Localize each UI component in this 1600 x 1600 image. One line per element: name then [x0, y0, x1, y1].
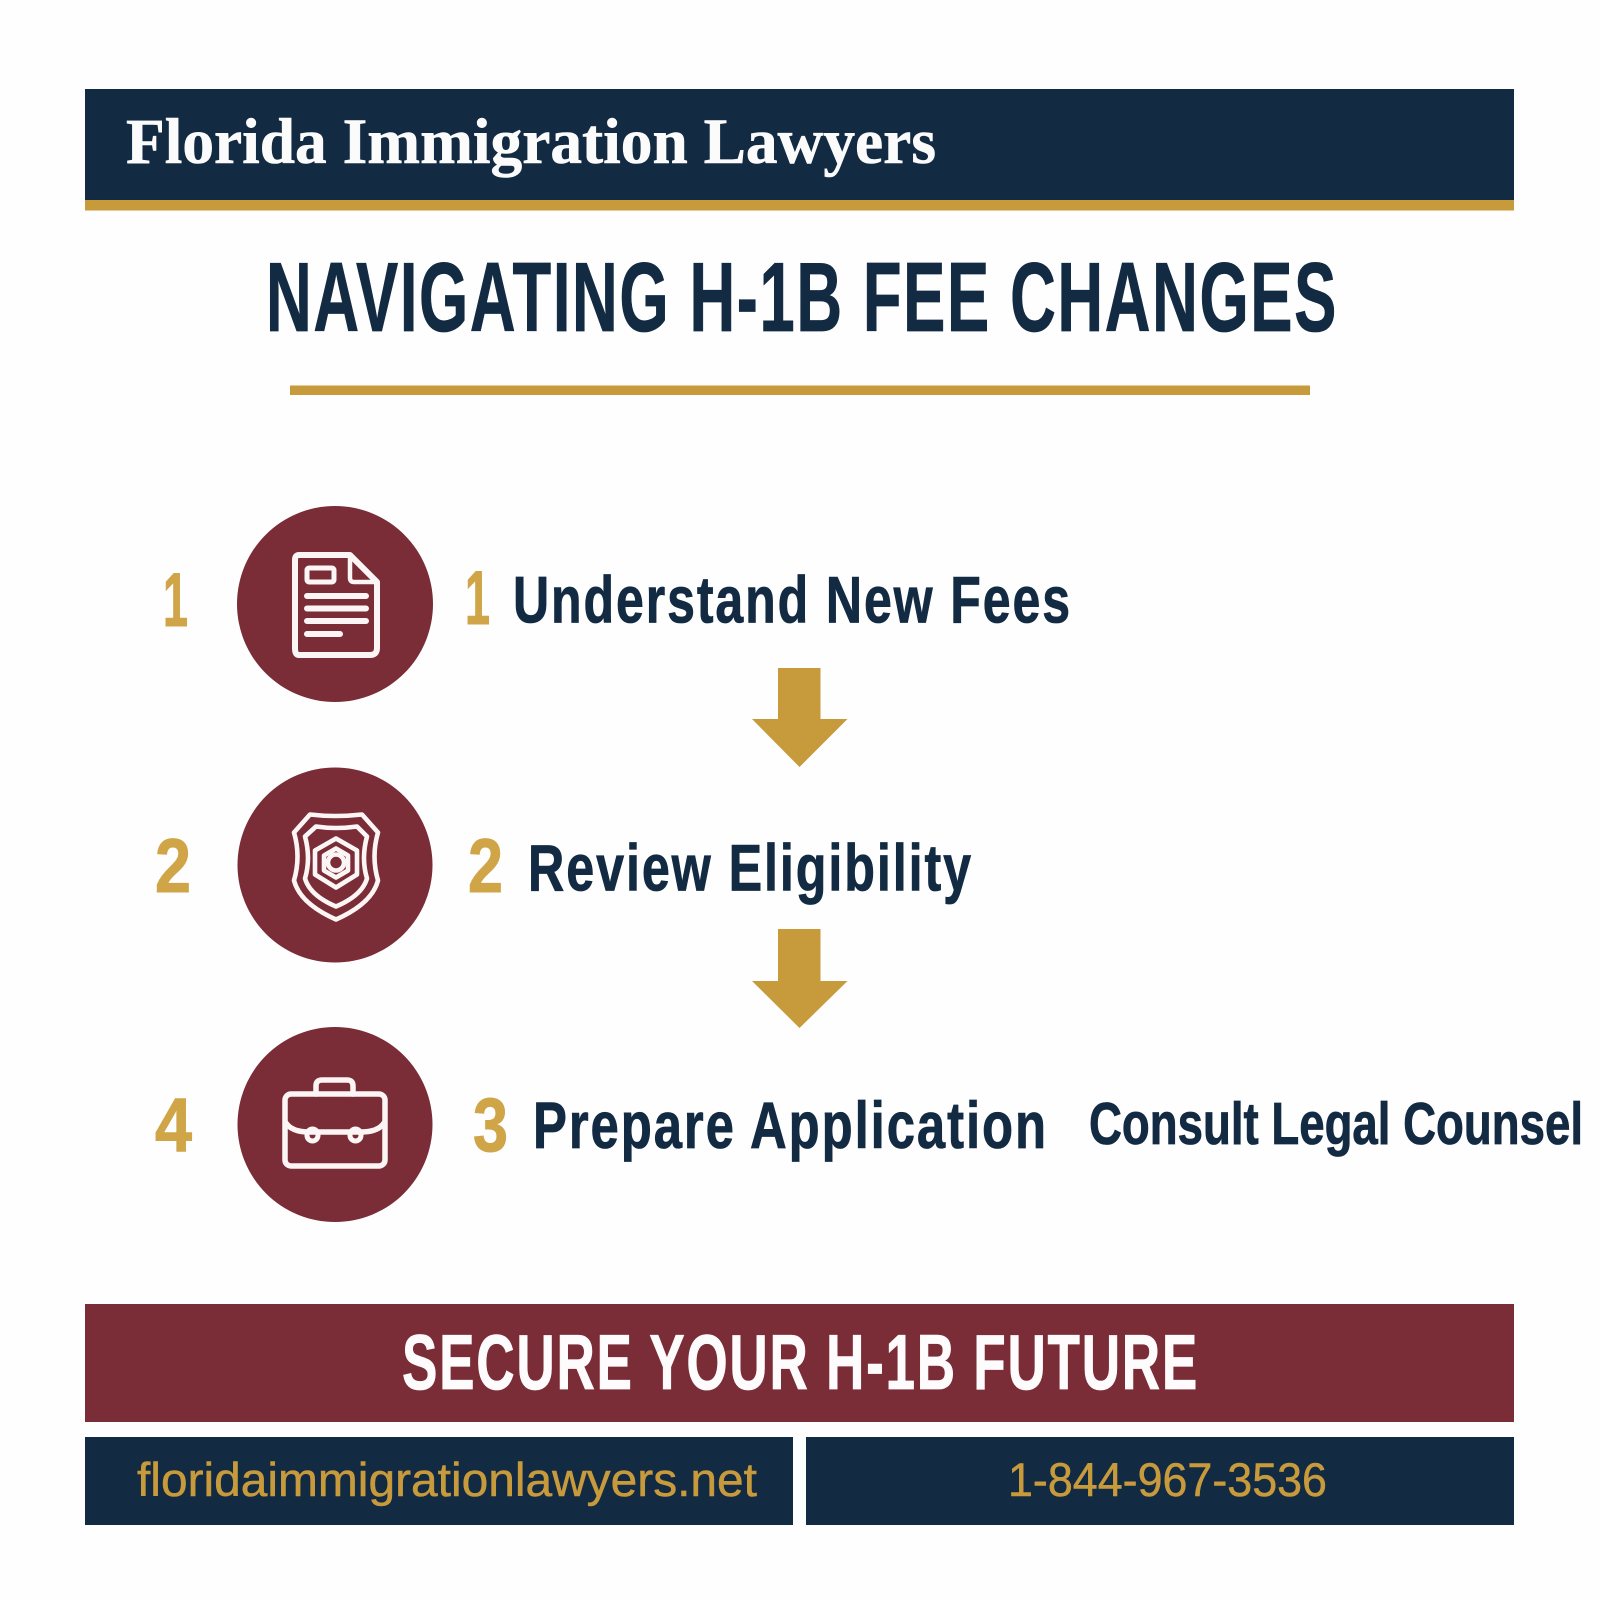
- website panel: [85, 1437, 793, 1525]
- icon: briefcase: [238, 1027, 432, 1222]
- step label: Review Eligibility: [528, 830, 973, 904]
- outer number 1: 1: [163, 558, 188, 643]
- arrow 1: [752, 668, 848, 767]
- step 2 row: [155, 768, 973, 962]
- arrow 2: [752, 929, 848, 1028]
- inner number 3: 3: [473, 1083, 508, 1168]
- icon: document: [237, 506, 433, 702]
- outer number 2: 2: [155, 824, 191, 909]
- header banner: [85, 89, 1514, 210]
- step label: Prepare Application: [533, 1088, 1048, 1162]
- call to action banner: [85, 1304, 1514, 1422]
- inner number 1: 1: [465, 556, 490, 641]
- website text: floridaimmigrationlawyers.net: [137, 1453, 757, 1506]
- inner number 2: 2: [468, 824, 503, 909]
- call to action text: SECURE YOUR H-1B FUTURE: [402, 1318, 1199, 1406]
- step label: Understand New Fees: [513, 562, 1072, 636]
- phone panel: [806, 1437, 1514, 1525]
- step 1 row: [163, 506, 1072, 702]
- step 3 row: [155, 1027, 1583, 1222]
- phone text: 1-844-967-3536: [1008, 1453, 1327, 1506]
- title underline: [290, 386, 1310, 395]
- icon: shield: [238, 768, 432, 962]
- brand name: Florida Immigration Lawyers: [126, 106, 936, 178]
- outer number 4: 4: [155, 1083, 192, 1168]
